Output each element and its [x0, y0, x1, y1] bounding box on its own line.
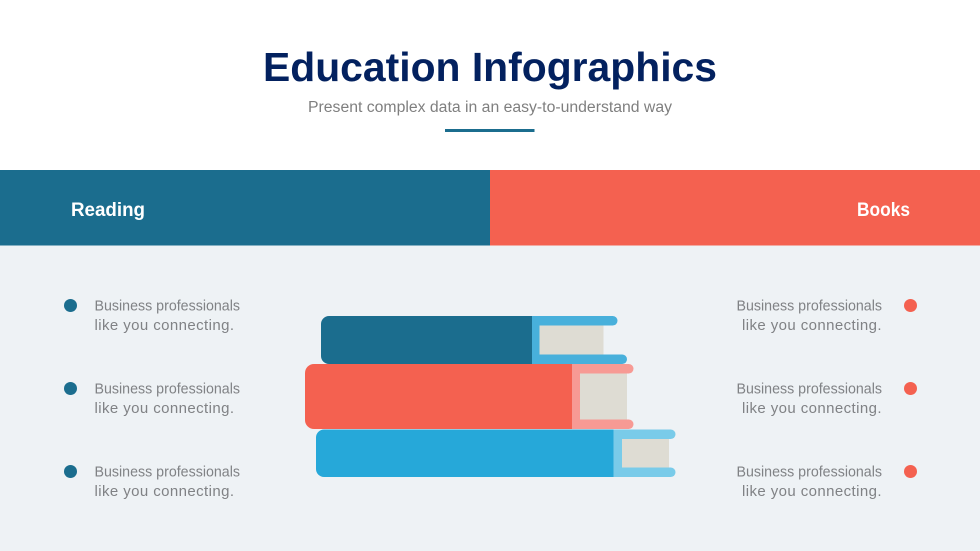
- illustration: stack of books: [305, 316, 676, 477]
- title underline: [445, 129, 534, 132]
- list item 1 right: like you connecting.: [742, 317, 882, 334]
- list item 1 left: [64, 298, 240, 334]
- list item 2 left: Business professionals: [94, 380, 240, 398]
- list item 1 left: Business professionals: [94, 298, 240, 314]
- icon: bottom blue book: [316, 430, 676, 477]
- list item 3 left: Business professionals: [94, 464, 240, 480]
- list item 2 left: like you connecting.: [94, 400, 234, 417]
- panel: Books header: [490, 170, 980, 246]
- subtitle: Present complex data in an easy-to-understand way: [308, 99, 672, 116]
- list item 1 left: like you connecting.: [94, 317, 234, 334]
- list item 1 right: Business professionals: [736, 298, 882, 314]
- icon: middle red book: [305, 364, 634, 429]
- list item 2 right: Business professionals: [736, 380, 882, 398]
- list item 2 right: [736, 380, 917, 417]
- list item 1 right: [736, 298, 917, 334]
- panel: Reading header: [0, 170, 490, 246]
- list item 3 right: Business professionals: [736, 464, 882, 480]
- list item 2 right: like you connecting.: [742, 400, 882, 417]
- list item 3 right: like you connecting.: [742, 483, 882, 500]
- list item 3 left: [64, 464, 240, 500]
- list item 2 left: [64, 380, 240, 417]
- list item 3 right: [736, 464, 917, 500]
- list item 3 left: like you connecting.: [94, 483, 234, 500]
- heading: Reading: Reading: [71, 200, 145, 221]
- icon: top teal book: [321, 316, 627, 364]
- heading: Books: Books: [857, 200, 910, 221]
- panel: left list: [64, 298, 240, 500]
- title: Education Infographics: [263, 44, 717, 90]
- panel: right list: [736, 298, 917, 500]
